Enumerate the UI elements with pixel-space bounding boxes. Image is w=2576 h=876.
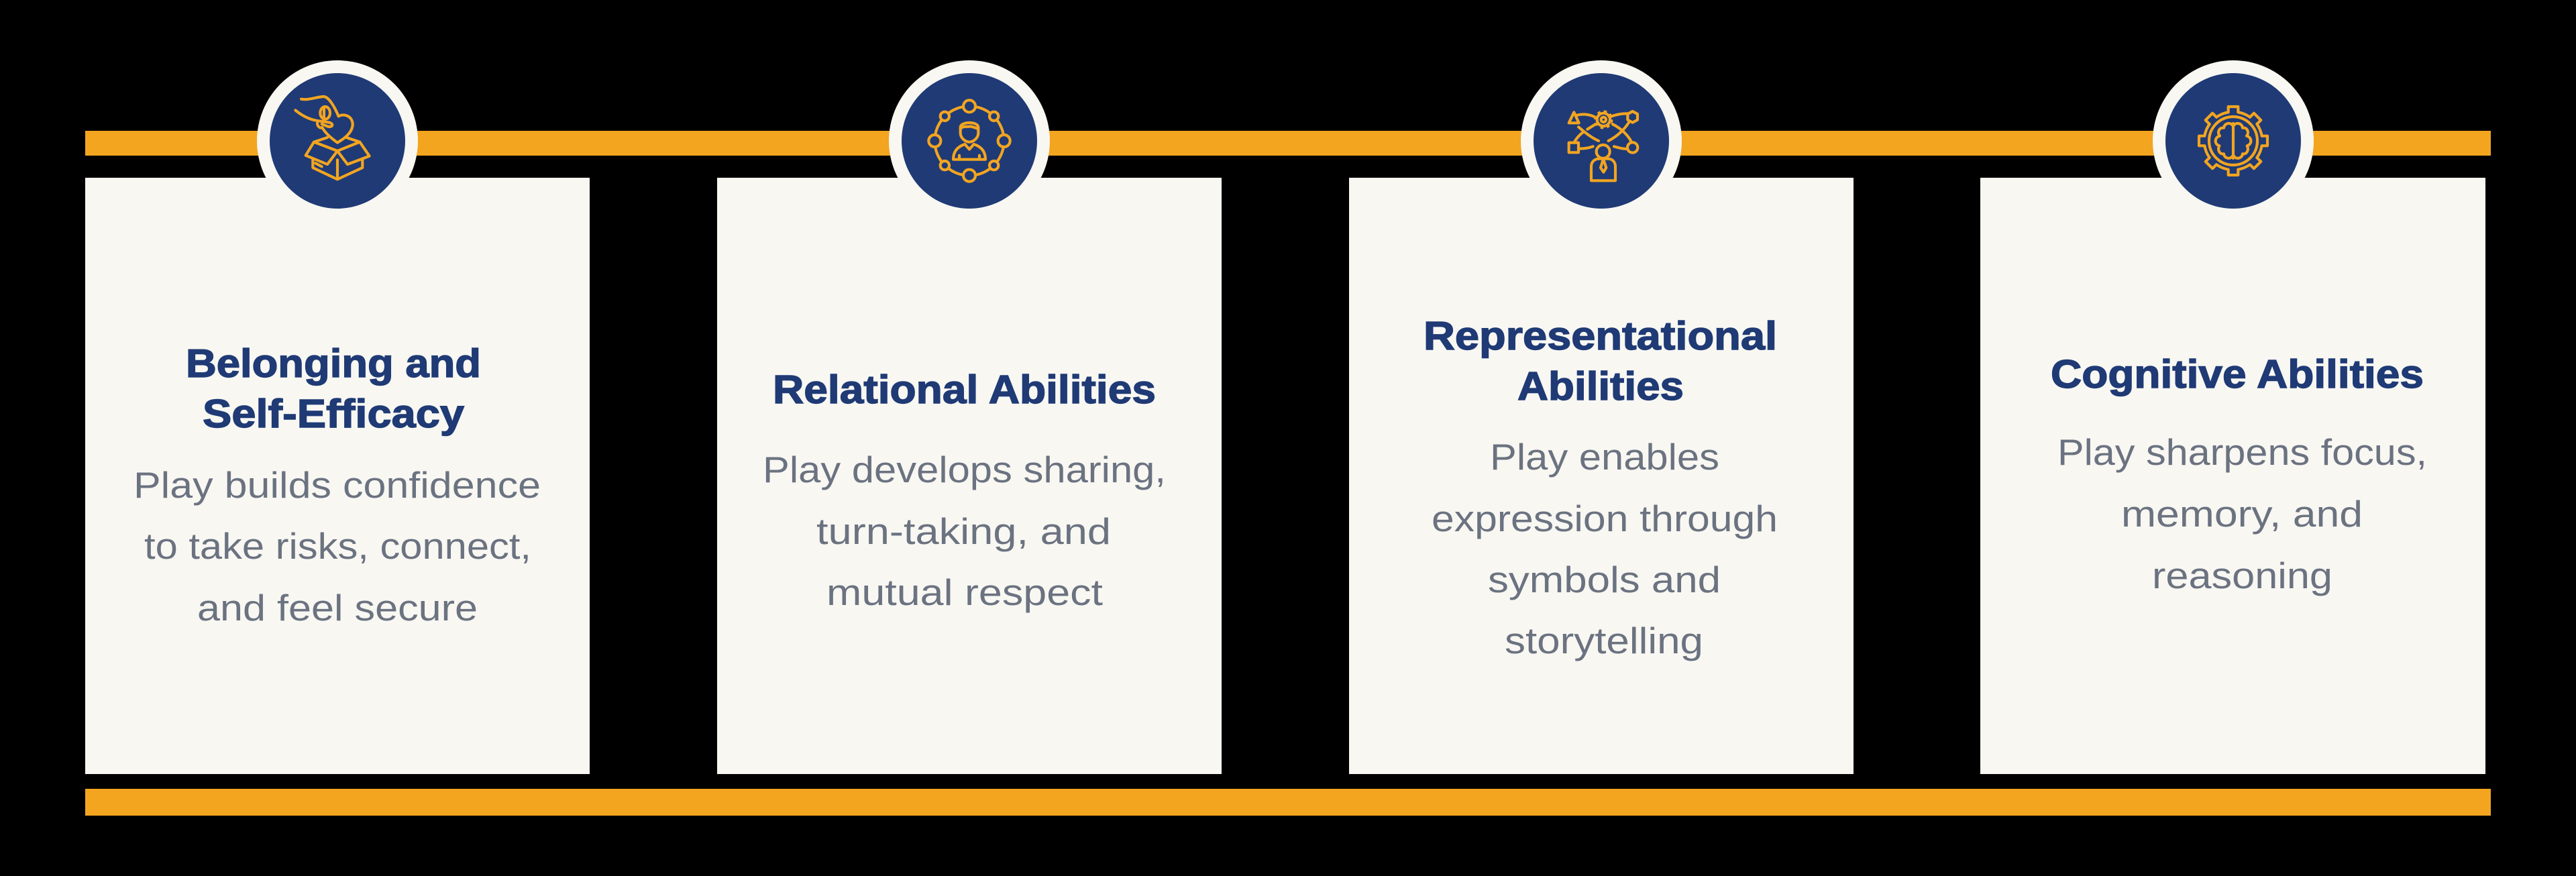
body text <box>2057 431 2427 596</box>
icon: brain in gear <box>2153 60 2314 221</box>
top orange bar <box>85 131 2491 156</box>
card background <box>717 178 1222 774</box>
panel: relational abilities <box>717 60 1222 774</box>
body text: storytelling <box>1505 620 1703 661</box>
card background <box>1349 178 1854 774</box>
heading <box>1424 314 1777 408</box>
bottom orange bar <box>85 789 2491 816</box>
panel: belonging and self-efficacy <box>85 60 590 774</box>
body text: to take risks, connect, <box>144 525 531 567</box>
card background <box>85 178 590 774</box>
heading: Self-Efficacy <box>203 392 464 436</box>
body text: Play sharpens focus, <box>2057 431 2427 473</box>
icon: person in network ring <box>889 60 1050 221</box>
body text: expression through <box>1432 498 1778 539</box>
icon: person with connected symbols <box>1521 60 1682 221</box>
heading: Relational Abilities <box>773 368 1156 412</box>
card background <box>1980 178 2485 774</box>
body text: memory, and <box>2121 493 2363 535</box>
heading <box>186 341 481 436</box>
heading: Abilities <box>1517 364 1684 408</box>
heading: Cognitive Abilities <box>2051 352 2424 396</box>
icon: hand placing heart in box <box>257 60 418 221</box>
body text: and feel secure <box>197 587 478 628</box>
body text: Play builds confidence <box>133 464 541 506</box>
panel: representational abilities <box>1349 60 1854 774</box>
heading: Representational <box>1424 314 1777 358</box>
body text <box>1432 436 1778 661</box>
body text: Play develops sharing, <box>763 449 1166 490</box>
body text: symbols and <box>1488 559 1721 600</box>
body text: turn-taking, and <box>816 510 1111 552</box>
body text: reasoning <box>2152 555 2332 596</box>
heading: Belonging and <box>186 341 481 386</box>
body text <box>133 464 541 628</box>
body text: Play enables <box>1490 436 1719 478</box>
panel: cognitive abilities <box>1980 60 2485 774</box>
body text: mutual respect <box>826 571 1103 613</box>
body text <box>763 449 1166 613</box>
